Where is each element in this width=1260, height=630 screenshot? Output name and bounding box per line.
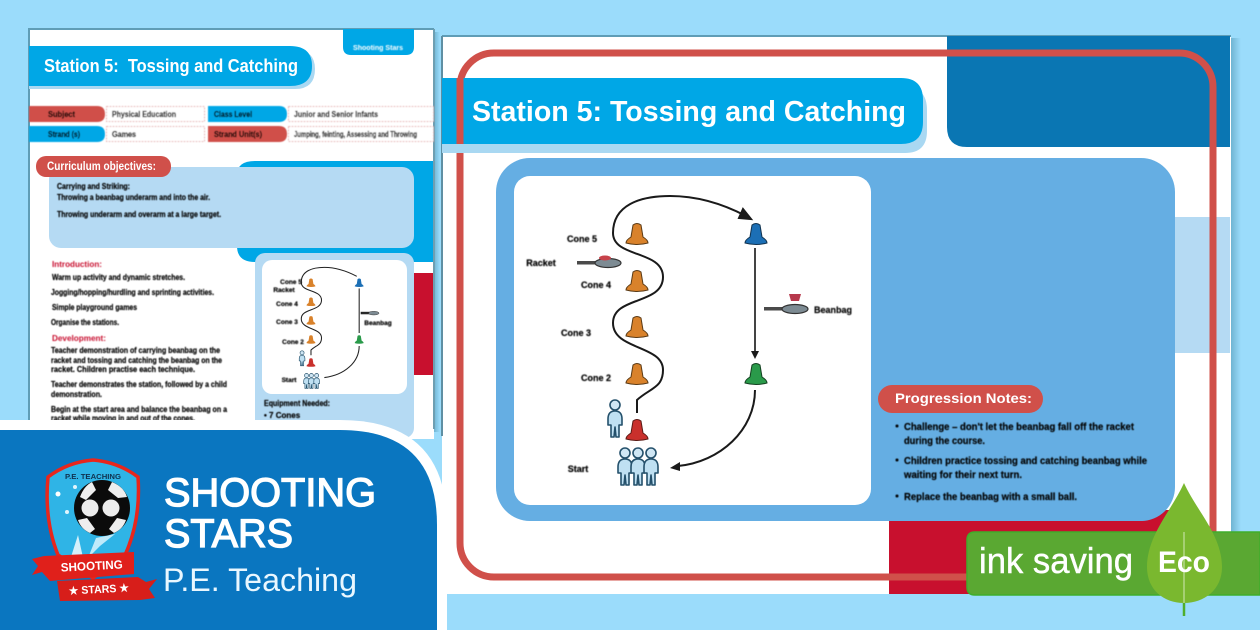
diagram labels: Beanbag — [814, 305, 852, 315]
heading: left page title: Station 5: Tossing and Catching — [44, 56, 298, 76]
panel: curriculum objectives: Curriculum objectives: — [47, 161, 156, 173]
callout: progression notes: Progression Notes: — [895, 390, 1032, 406]
heading: station title — [442, 78, 927, 153]
icons: orange cones — [626, 224, 648, 384]
panel: small station diagram: Start — [282, 377, 297, 384]
callout: progression notes: Replace the beanbag with a small ball. — [904, 492, 1077, 503]
table: lesson details: Games — [112, 130, 136, 139]
red bottom block — [889, 510, 1195, 594]
panel: Shooting Stars brand banner — [0, 420, 447, 630]
panel: small station diagram — [255, 253, 414, 438]
brand name: STARS — [164, 512, 293, 556]
panel: small station diagram: Beanbag — [364, 320, 392, 327]
table: lesson details: Class Level — [214, 110, 252, 119]
text block: introduction and development: racket. Children practise each technique. — [51, 365, 195, 374]
icon: racket — [577, 256, 621, 268]
diagram labels: Start — [568, 464, 588, 474]
heading: station title: Station 5: Tossing and Catching — [472, 96, 906, 128]
panel: curriculum objectives: Carrying and Striking: — [57, 182, 130, 191]
text block: introduction and development: Teacher demonstrates the station, followed by a child — [51, 380, 227, 389]
icon: Shooting Stars crest — [32, 460, 157, 601]
diagram labels: Cone 5 — [567, 234, 597, 244]
text block: introduction and development: Organise the stations. — [51, 318, 119, 327]
tab: Shooting Stars: Shooting Stars — [353, 45, 403, 52]
text block: introduction and development: Introduction: — [52, 259, 102, 269]
panel: small station diagram: Racket — [273, 287, 295, 294]
callout: progression notes — [878, 385, 1147, 503]
callout: progression notes: Challenge – don't let the beanbag fall off the racket — [904, 422, 1135, 433]
table: lesson details: Subject — [48, 110, 75, 119]
table: lesson details: Strand Unit(s) — [214, 130, 262, 139]
heading: left page title — [29, 46, 315, 89]
panel: small station diagram: Cone 2 — [282, 339, 304, 346]
blue corner block — [947, 36, 1230, 147]
diagram labels: Racket — [526, 258, 556, 268]
icon: Shooting Stars crest: SHOOTING — [60, 557, 123, 575]
icon: Shooting Stars crest: ★ STARS ★ — [69, 582, 129, 598]
icons: children — [608, 400, 658, 485]
panel: curriculum objectives — [36, 156, 414, 248]
panel: curriculum objectives: Throwing underarm and overarm at a large target. — [57, 210, 221, 219]
panel: left worksheet page — [28, 28, 440, 439]
callout: progression notes: during the course. — [904, 436, 985, 447]
red rounded outline — [460, 53, 1213, 577]
panel: station diagram — [514, 176, 871, 505]
arrow: curved return to start — [670, 390, 755, 471]
table: lesson details — [29, 106, 434, 142]
callout: progression notes: waiting for their next turn. — [903, 470, 1022, 481]
icon: blue cone — [745, 224, 767, 244]
text block: introduction and development: Simple playground games — [52, 303, 137, 312]
brand subtitle: P.E. Teaching — [163, 562, 357, 598]
panel: small station diagram: Cone 3 — [276, 319, 298, 326]
text block: introduction and development: demonstration. — [51, 390, 102, 399]
icon: red start cone — [626, 420, 648, 440]
light blue side block — [1175, 217, 1230, 353]
table: lesson details: Jumping, feinting, Assessing and Throwing — [294, 130, 417, 139]
tab: Shooting Stars — [343, 29, 414, 55]
panel: blue activity panel — [496, 158, 1175, 521]
diagram labels — [526, 234, 852, 474]
text block: introduction and development: Jogging/hopping/hurdling and sprinting activities. — [51, 288, 214, 297]
text block: introduction and development — [51, 259, 227, 423]
text block: introduction and development: Teacher demonstration of carrying beanbag on the — [51, 346, 220, 355]
badge: ink saving eco: ink saving — [979, 540, 1133, 581]
text block: introduction and development: Begin at the start area and balance the beanbag on a — [51, 405, 227, 414]
badge: ink saving eco — [967, 483, 1260, 616]
arrow: weaving route through cones — [613, 196, 751, 413]
diagram labels: Cone 4 — [581, 280, 611, 290]
icon: green cone — [745, 364, 767, 384]
panel: small station diagram: Equipment Needed: — [264, 399, 330, 408]
arrow: straight run between far cones — [751, 248, 759, 359]
panel: small station diagram: Cone 5 — [280, 279, 302, 286]
icon: leaf: Eco — [1158, 546, 1210, 579]
diagram labels: Cone 2 — [581, 373, 611, 383]
table: lesson details: Junior and Senior Infants — [294, 110, 378, 119]
brand name — [164, 471, 376, 556]
table: lesson details: Strand (s) — [48, 130, 80, 139]
panel: curriculum objectives: Throwing a beanbag underarm and into the air. — [57, 193, 210, 202]
icon: racket with beanbag — [764, 294, 808, 314]
blue backing block — [237, 161, 433, 262]
panel: right worksheet page — [441, 35, 1241, 594]
diagram labels: Cone 3 — [561, 328, 591, 338]
text block: introduction and development: racket and tossing and catching the beanbag on the — [51, 356, 222, 365]
icon: Shooting Stars crest: P.E. TEACHING — [65, 472, 121, 481]
panel: small station diagram: • 7 Cones — [264, 411, 301, 420]
text block: introduction and development: Warm up activity and dynamic stretches. — [52, 273, 185, 282]
text block: introduction and development: racket while moving in and out of the cones. — [51, 414, 195, 423]
text block: introduction and development: Development: — [52, 333, 106, 343]
table: lesson details: Physical Education — [112, 110, 176, 119]
icon: leaf — [1147, 483, 1222, 616]
brand name: SHOOTING — [164, 471, 376, 515]
panel: small station diagram: Cone 4 — [276, 301, 298, 308]
callout: progression notes: Children practice tossing and catching beanbag while — [904, 456, 1147, 467]
red side block — [414, 273, 433, 375]
